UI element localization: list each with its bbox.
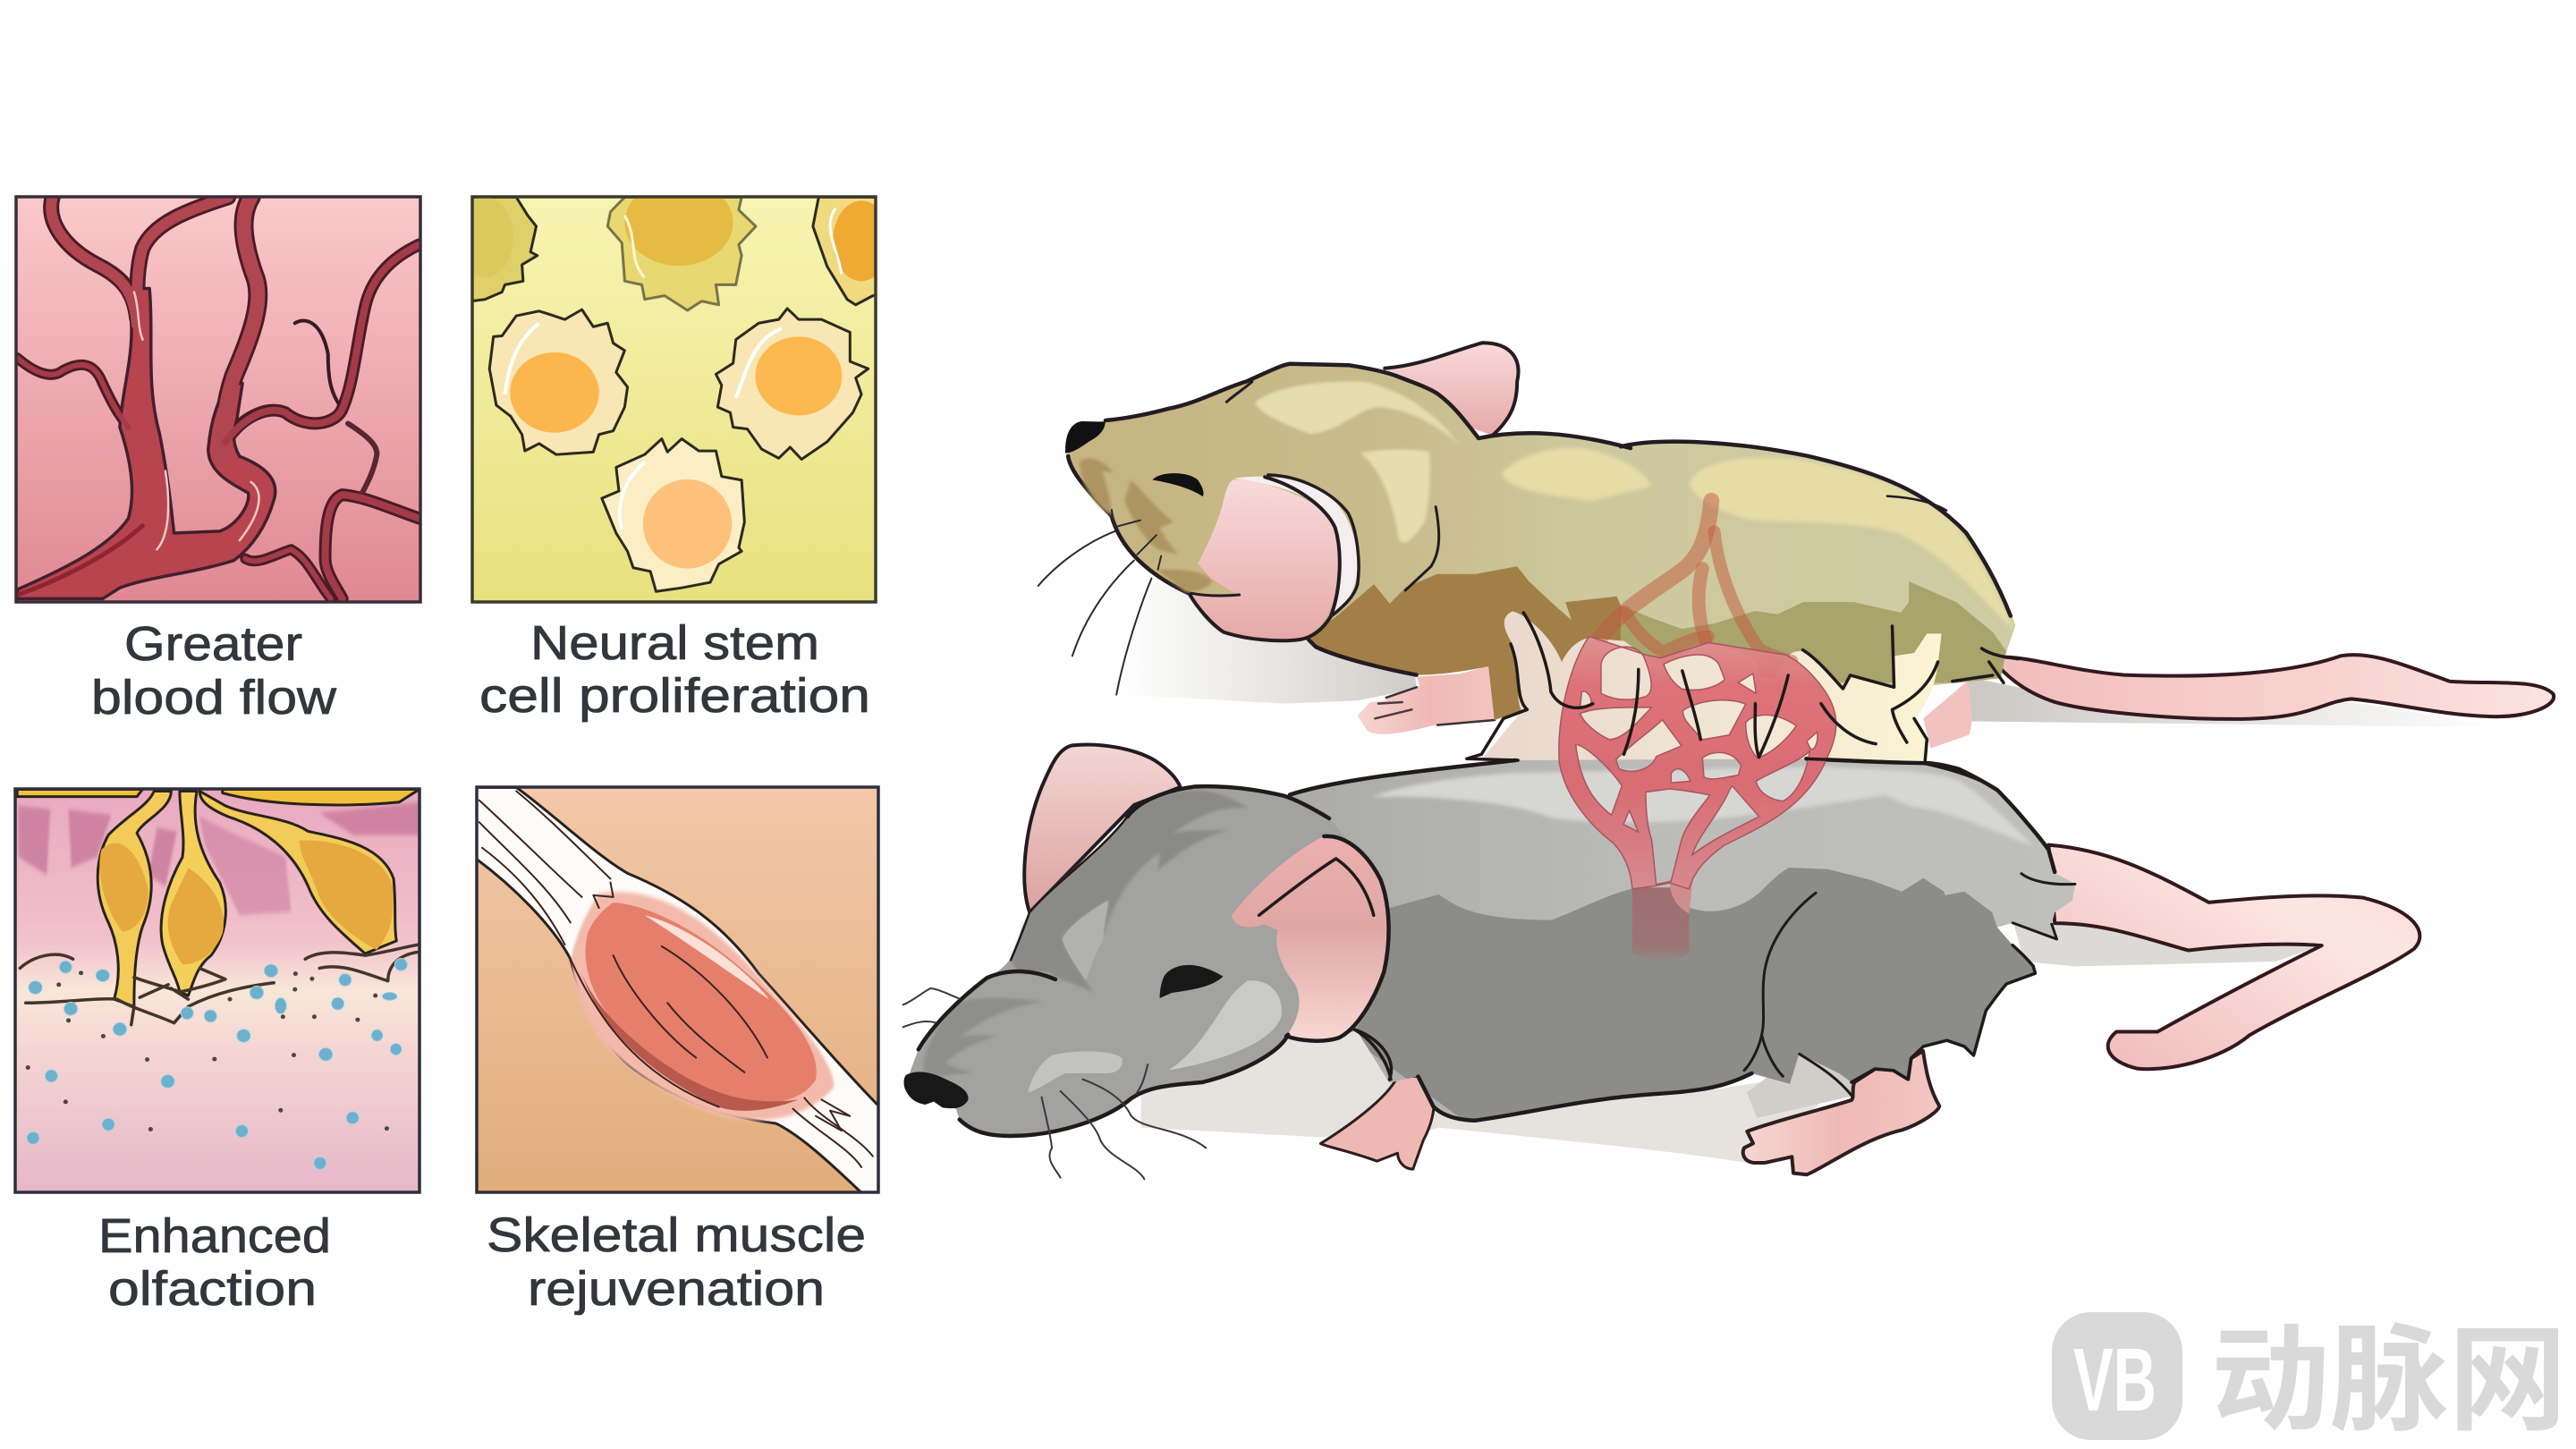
- head highlight: [1255, 381, 1460, 445]
- caption: greater blood flow: blood flow: [91, 671, 337, 724]
- caption: enhanced olfaction: Enhanced: [98, 1209, 331, 1263]
- muscle belly glow: [572, 892, 834, 1121]
- ground shadow under head: [1116, 581, 1417, 704]
- watermark logo: [2052, 1312, 2567, 1445]
- blood vessel branches: [17, 197, 419, 598]
- head fur: [904, 786, 1391, 1136]
- tendon and muscle sheath: [473, 787, 881, 1193]
- back ear: [1385, 343, 1518, 436]
- main artery trunk: [17, 288, 275, 598]
- muscle fibres and tendon lines: [479, 791, 873, 1167]
- front foot: [1358, 666, 1501, 734]
- fur highlight shoulder: [1503, 448, 1650, 501]
- back ear outline: [1385, 343, 1518, 436]
- vessel stem lower: [1632, 887, 1689, 961]
- hind foot: [1923, 682, 1971, 749]
- head: [903, 744, 1391, 1179]
- whiskers: [903, 988, 1206, 1179]
- rear shadow and back parts: [1385, 343, 2554, 728]
- panel: enhanced olfaction: [15, 789, 419, 1192]
- caption: neural stem cell proliferation: Neural stem: [530, 616, 819, 670]
- odorant molecules: [27, 958, 407, 1169]
- back fur tuft: [1887, 496, 1946, 511]
- caption: greater blood flow: Greater: [124, 617, 302, 671]
- cream lower body lobes: [1481, 611, 1971, 760]
- nose patch highlight: [1028, 1051, 1123, 1093]
- body fur: [1202, 758, 2075, 1124]
- vessel branches over young mouse: [1601, 501, 1792, 661]
- fur lines over vessels and cream lobes: [1467, 613, 2018, 787]
- caption: enhanced olfaction: olfaction: [108, 1262, 317, 1316]
- olfactory neurons: [17, 789, 419, 1006]
- nose: [904, 1072, 968, 1108]
- dark lower body: [1346, 868, 2055, 1124]
- caption: neural stem cell proliferation: cell proliferation: [479, 669, 870, 723]
- eye: [1153, 473, 1204, 496]
- caption: skeletal muscle rejuvenation: Skeletal muscle: [487, 1208, 866, 1262]
- watermark wordmark: 动脉网: [2211, 1315, 2567, 1445]
- fur highlight back: [1690, 457, 2015, 631]
- small particles: [26, 970, 389, 1131]
- muscle belly: [586, 902, 817, 1104]
- stem cell top left: [474, 199, 538, 302]
- head outlines: [919, 786, 1391, 1136]
- ground shadow under tail: [1966, 676, 2509, 728]
- stem cell middle left: [489, 309, 628, 454]
- tail: [2048, 845, 2419, 1069]
- head dark strip: [1011, 790, 1249, 993]
- pink ear: [1190, 479, 1339, 640]
- fur highlight back: [1372, 767, 2034, 846]
- mucosa shading: [18, 802, 419, 915]
- stem cell top right: [811, 199, 875, 306]
- muzzle fur texture: [1080, 459, 1212, 592]
- front foot: [1320, 1077, 1434, 1169]
- illustration: young tan mouse: [1038, 343, 2554, 760]
- capillary bed: [1559, 637, 1836, 889]
- vessel branch fills: [17, 197, 419, 598]
- ear outlines: [1190, 382, 1439, 640]
- stem cell bottom: [602, 439, 744, 591]
- body outlines: [1290, 758, 2057, 1121]
- muscle underside shadow: [582, 974, 799, 1111]
- hind foot: [1743, 1051, 1939, 1174]
- body fur: [1068, 364, 2015, 721]
- whiskers: [1038, 510, 1161, 695]
- tail: [1991, 655, 2554, 719]
- stem cell top centre: [606, 199, 758, 311]
- front ear: [1232, 836, 1389, 1041]
- white ear rim: [1233, 477, 1358, 617]
- logo badge: [2052, 1312, 2182, 1440]
- panel: greater blood flow: [16, 197, 420, 602]
- dark belly fur left: [1295, 566, 1640, 721]
- panel: skeletal muscle rejuvenation: [473, 787, 881, 1193]
- ground shadows: [1141, 923, 2322, 1163]
- head details: [1038, 381, 1460, 695]
- nose: [1065, 421, 1106, 453]
- back ear: [1024, 744, 1181, 912]
- caption: skeletal muscle rejuvenation: rejuvenation: [528, 1262, 825, 1316]
- cheek highlight: [1168, 980, 1282, 1071]
- stem cell middle right: [716, 309, 869, 459]
- body top outline: [1068, 364, 2011, 675]
- eye: [1160, 965, 1223, 998]
- panel: neural stem cell proliferation: [456, 180, 890, 602]
- muzzle dark fur: [923, 998, 1043, 1076]
- dark belly fur right: [1621, 581, 2015, 683]
- muscle highlight: [645, 915, 769, 999]
- illustration: old grey mouse: [903, 744, 2419, 1179]
- logo letters: VB: [2073, 1330, 2157, 1430]
- shared vascular network: [1559, 501, 1836, 961]
- cheek highlight: [1360, 450, 1430, 543]
- temple highlight: [1063, 901, 1108, 981]
- body group: [1141, 845, 2419, 1169]
- dark nerve endings: [20, 945, 419, 1025]
- thigh creases: [1744, 874, 2075, 1097]
